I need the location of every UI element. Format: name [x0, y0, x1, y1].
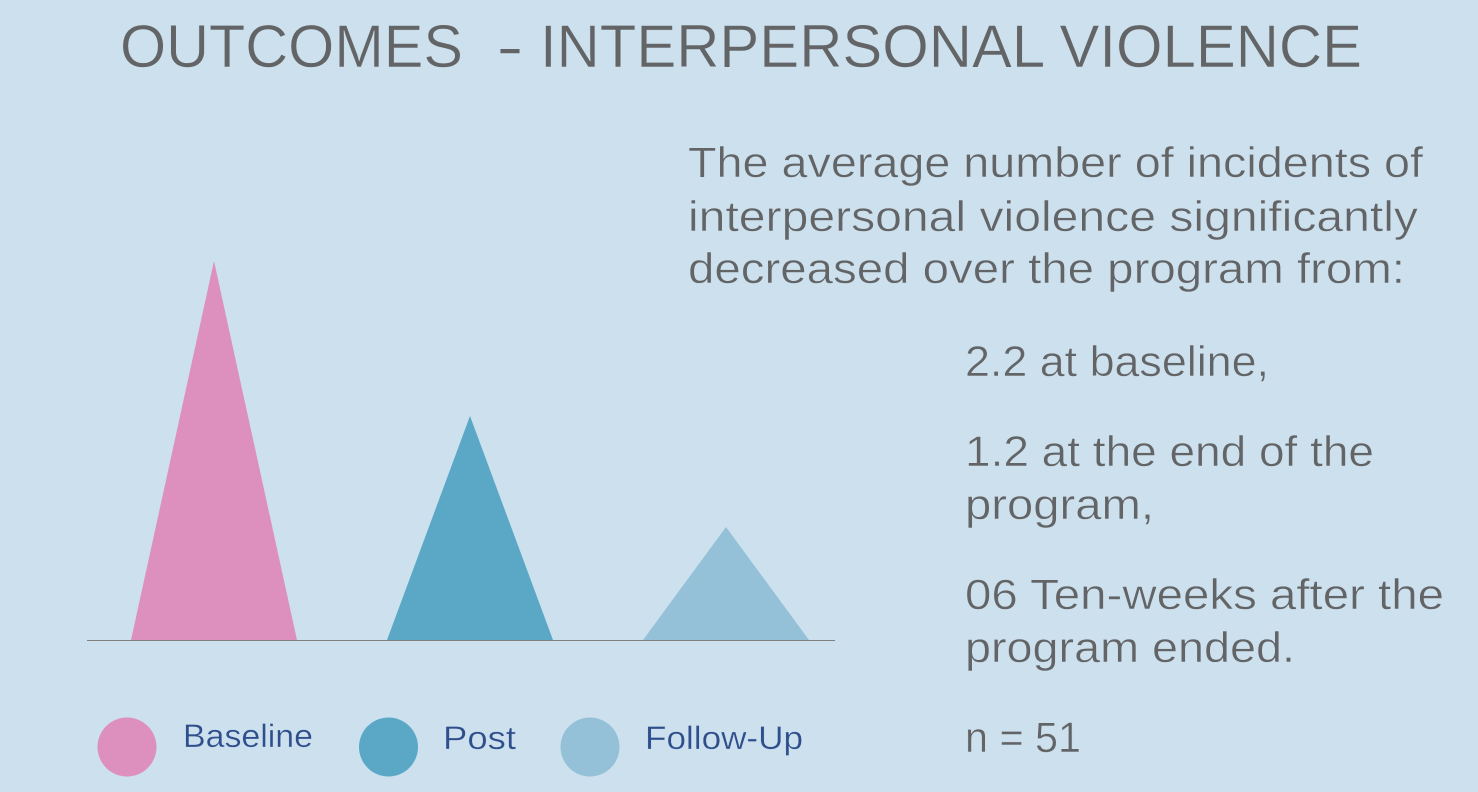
- stat: baseline: 2.2 at baseline,: [965, 338, 1269, 386]
- bar: follow-up: [643, 527, 809, 640]
- legend: follow-up: [560, 718, 803, 776]
- legend: follow-up: Follow-Up: [645, 720, 803, 756]
- title: [120, 13, 1362, 80]
- stat: post: [965, 428, 1374, 529]
- legend: post: Post: [443, 720, 516, 756]
- description text: [688, 139, 1424, 293]
- title: -: [496, 13, 524, 80]
- bar: baseline: [131, 261, 297, 640]
- title: OUTCOMES: [120, 13, 463, 80]
- sample size: n = 51: [965, 714, 1081, 762]
- title: INTERPERSONAL VIOLENCE: [540, 13, 1362, 80]
- triangle chart: [87, 261, 835, 640]
- legend: [98, 718, 803, 776]
- legend: baseline: Baseline: [183, 718, 313, 754]
- stat: follow-up: program ended.: [965, 624, 1295, 672]
- description text: decreased over the program from:: [688, 245, 1405, 293]
- description text: interpersonal violence significantly: [688, 193, 1419, 241]
- stat: post: 1.2 at the end of the: [965, 428, 1374, 476]
- stat: follow-up: [965, 571, 1444, 672]
- axis line: [87, 640, 835, 642]
- description text: The average number of incidents of: [688, 139, 1424, 187]
- legend: post: [359, 718, 516, 776]
- stat: post: program,: [965, 481, 1154, 529]
- legend: baseline: [98, 718, 313, 776]
- bar: post: [387, 416, 553, 640]
- stat: follow-up: 06 Ten-weeks after the: [965, 571, 1444, 619]
